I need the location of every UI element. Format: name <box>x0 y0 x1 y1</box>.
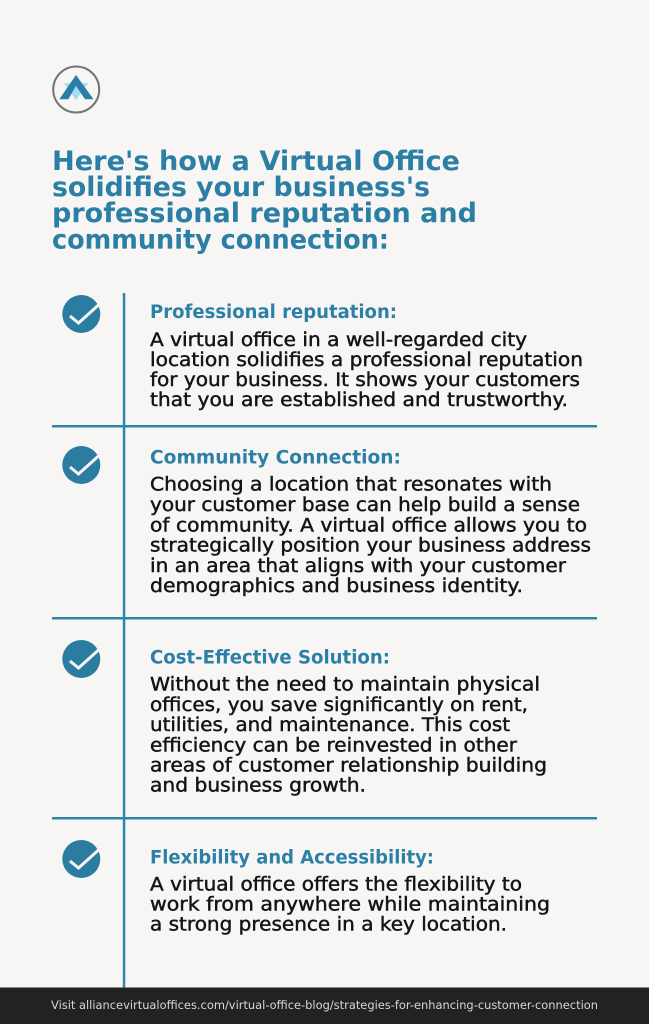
footer bar <box>0 988 649 1024</box>
text block: flexibility and accessibility: work from anywhere while maintaining <box>150 895 550 916</box>
text block: cost-effective solution: and business growth. <box>150 776 366 797</box>
text block: community connection: demographics and business identity. <box>150 576 523 597</box>
text block: cost-effective solution: offices, you save significantly on rent, <box>150 695 528 716</box>
text block: cost-effective solution: efficiency can be reinvested in other <box>150 736 518 757</box>
text block: professional reputation: for your business. It shows your customers <box>150 370 580 391</box>
panel: flexibility and accessibility <box>62 840 550 936</box>
title: professional reputation and <box>52 198 477 229</box>
text block: flexibility and accessibility: A virtual office offers the flexibility to <box>150 874 522 895</box>
text block: cost-effective solution: areas of customer relationship building <box>150 756 547 777</box>
text block: community connection <box>150 475 591 597</box>
text block: professional reputation: that you are established and trustworthy. <box>150 390 568 411</box>
text block: professional reputation: location solidifies a professional reputation <box>150 350 583 371</box>
vertical timeline line <box>123 293 125 988</box>
panel: professional reputation <box>62 295 583 411</box>
title <box>52 146 477 256</box>
heading: professional reputation: Professional reputation: <box>150 302 397 323</box>
heading: community connection: Community Connection: <box>150 448 401 468</box>
text block: community connection: Choosing a location that resonates with <box>150 475 552 496</box>
text block: professional reputation <box>150 330 583 411</box>
icon: check mark 2 <box>62 446 100 484</box>
text block: flexibility and accessibility <box>150 874 550 936</box>
icon: check mark 3 <box>62 640 100 678</box>
text block: community connection: strategically position your business address <box>150 536 591 557</box>
heading: flexibility and accessibility: Flexibility and Accessibility: <box>150 848 434 868</box>
text block: flexibility and accessibility: a strong presence in a key location. <box>150 915 507 936</box>
icon: check mark 4 <box>62 840 100 878</box>
heading: cost-effective solution: Cost-Effective Solution: <box>150 648 390 668</box>
title: Here's how a Virtual Office <box>52 146 460 177</box>
panel: community connection <box>62 446 591 597</box>
text block: cost-effective solution: utilities, and maintenance. This cost <box>150 715 510 736</box>
icon: company logo <box>53 66 99 112</box>
text block: cost-effective solution <box>150 675 547 797</box>
text block: community connection: in an area that aligns with your customer <box>150 556 567 577</box>
footer link text: Visit alliancevirtualoffices.com/virtual-office-blog/strategies-for-enhancing-customer-connection <box>51 998 598 1012</box>
text block: professional reputation: A virtual office in a well-regarded city <box>150 330 527 351</box>
icon: check mark 1 <box>62 295 100 333</box>
text block: cost-effective solution: Without the need to maintain physical <box>150 675 540 696</box>
title: solidifies your business's <box>52 172 430 203</box>
text block: community connection: of community. A virtual office allows you to <box>150 515 587 536</box>
panel: cost-effective solution <box>62 640 547 797</box>
text block: community connection: your customer base can help build a sense <box>150 495 580 516</box>
title: community connection: <box>52 224 389 256</box>
